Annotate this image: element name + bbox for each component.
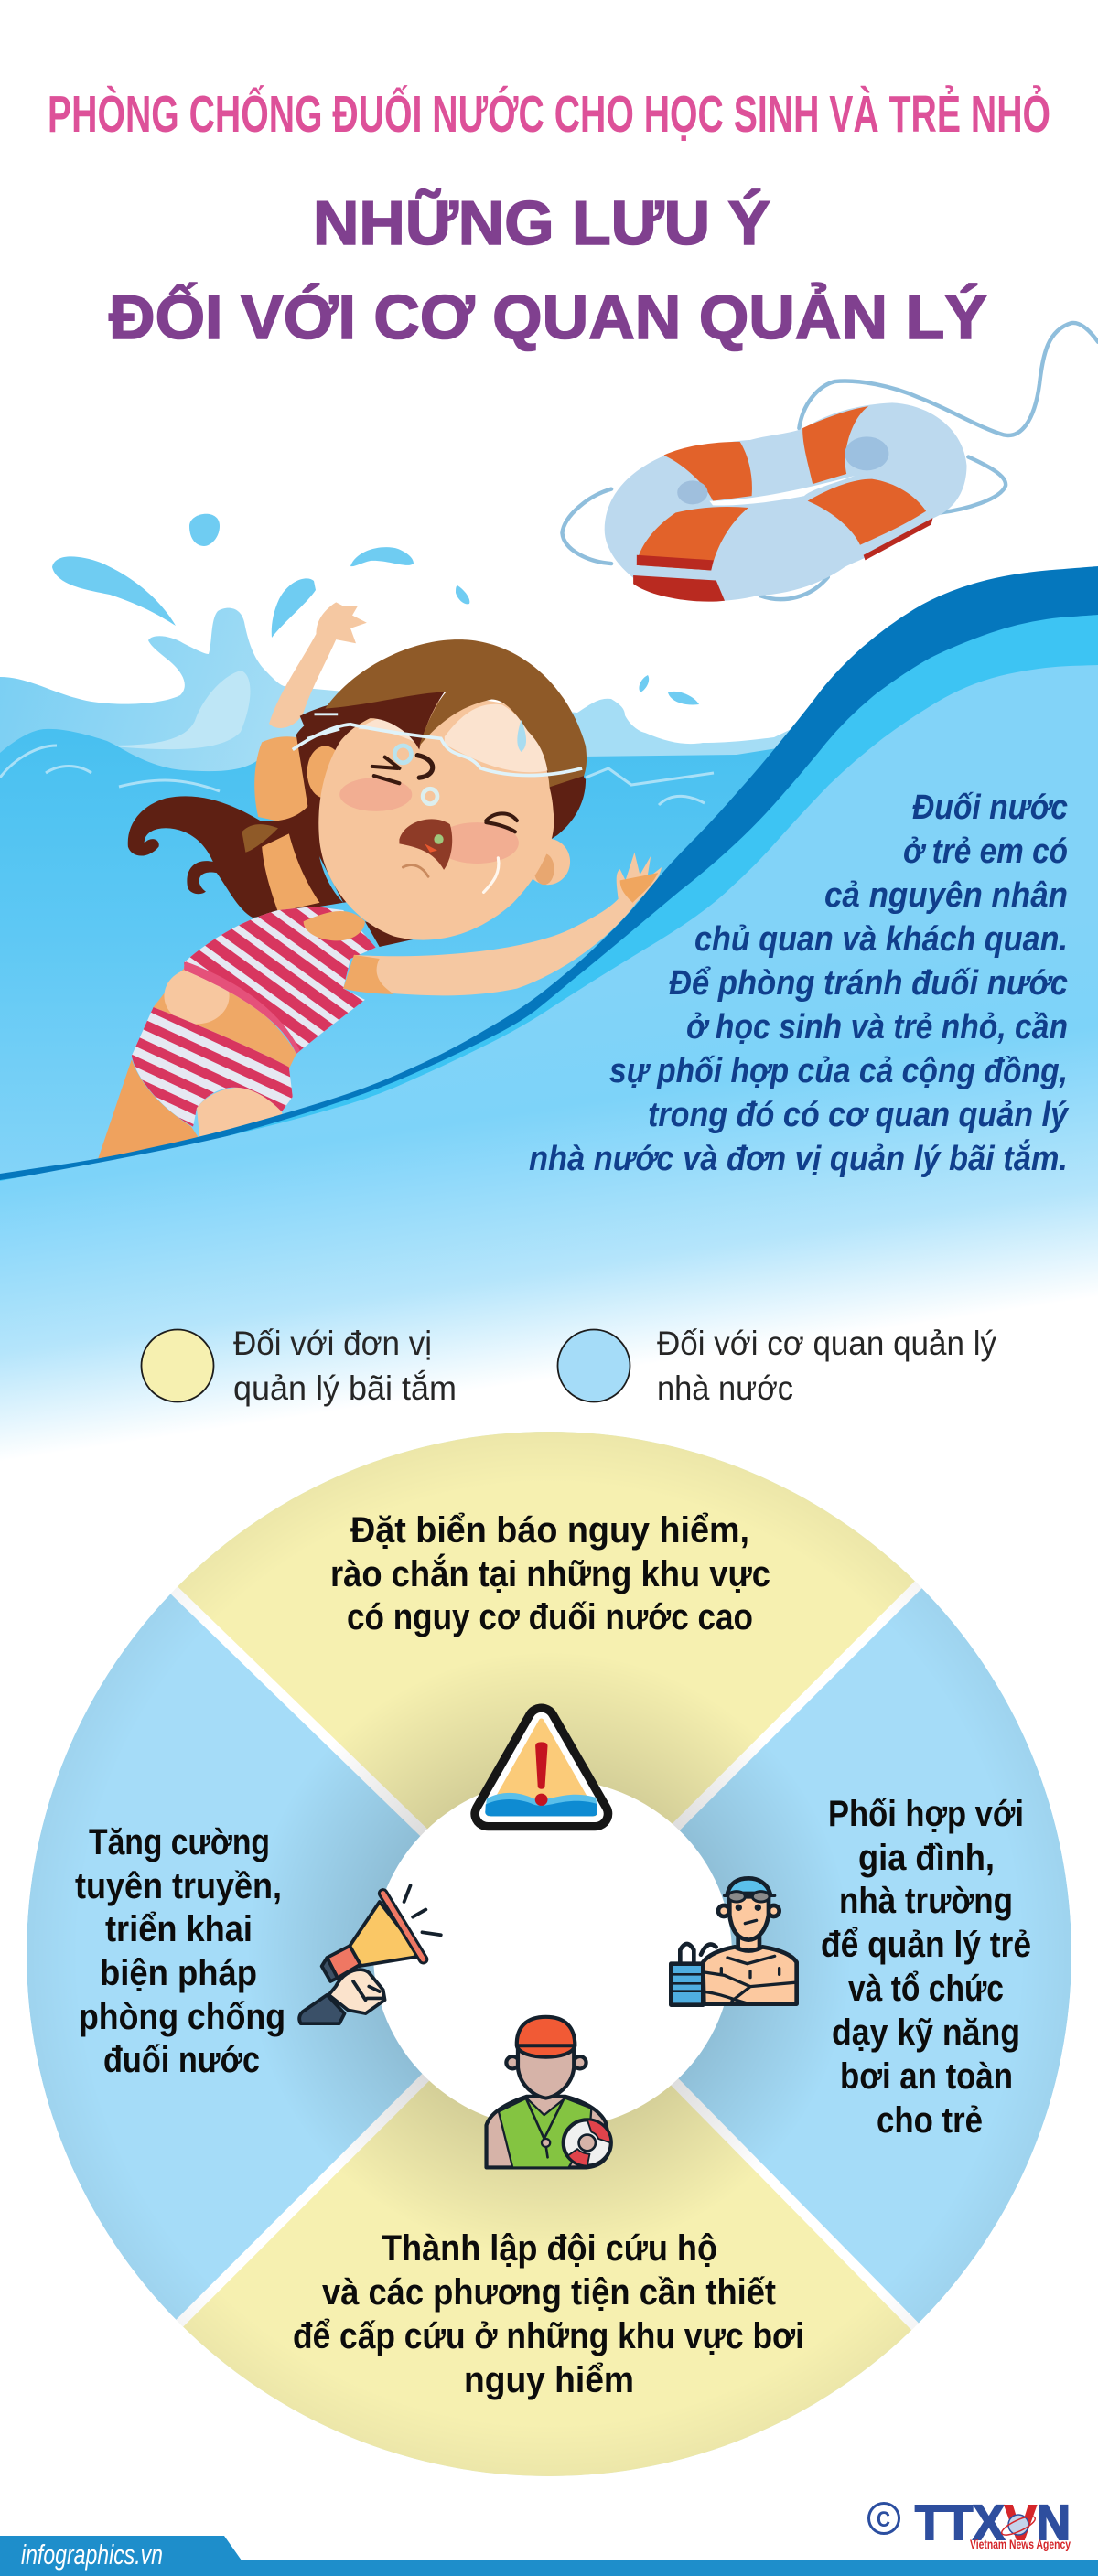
legend: beach management units: Đối với đơn vị (233, 1325, 432, 1362)
legend: beach management units: quản lý bãi tắm (233, 1369, 457, 1407)
icon: life buoy (562, 323, 1098, 602)
fringe shadow (300, 692, 445, 750)
legend: state agencies: nhà nước (657, 1369, 793, 1407)
text: left sector (75, 1822, 285, 2080)
mouth (399, 819, 452, 870)
blush (339, 778, 412, 811)
logo: TTXVN copyright: C (877, 2507, 890, 2532)
stripes (637, 406, 926, 570)
text: right sector: gia đình, (858, 1838, 995, 1878)
text: left sector: đuối nước (103, 2040, 260, 2080)
back hair (296, 701, 586, 903)
hole (709, 476, 855, 506)
water background behind girl (0, 608, 824, 1281)
text: intro paragraph (529, 789, 1070, 1178)
eyes, nose, tear (372, 756, 517, 892)
icon: water splashes (52, 514, 699, 704)
face (318, 699, 554, 940)
title: main heading: NHỮNG LƯU Ý (313, 188, 770, 258)
wave: cyan band (0, 615, 1098, 1372)
far-side ear (307, 746, 343, 799)
text: right sector: và tổ chức (848, 1969, 1004, 2009)
text: left sector: triển khai (105, 1909, 253, 1949)
raised arm (269, 602, 367, 728)
text: left sector: phòng chống (79, 1997, 285, 2037)
text: right sector: để quản lý trẻ (821, 1925, 1031, 1965)
swimsuit top (184, 906, 376, 1054)
text: right sector: cho trẻ (877, 2100, 983, 2141)
near ear (525, 839, 570, 885)
chart: life ring with four sectors (27, 1432, 1071, 2476)
title: main heading: ĐỐI VỚI CƠ QUAN QUẢN LÝ (109, 282, 987, 352)
text: bottom sector: nguy hiểm (464, 2360, 634, 2400)
wave: dark blue band (0, 566, 1098, 1372)
neck (304, 911, 365, 940)
illustration: drowning girl (98, 602, 662, 1179)
submerged arm (254, 736, 315, 824)
bubbles (394, 746, 411, 763)
text: intro paragraph: Đuối nước (912, 789, 1068, 827)
water line (293, 724, 582, 776)
front arm (343, 853, 662, 995)
text: intro paragraph: chủ quan và khách quan. (694, 920, 1068, 959)
text: left sector: Tăng cường (89, 1822, 270, 1862)
text: top sector: Đặt biển báo nguy hiểm, (350, 1510, 749, 1551)
footer bar (0, 2536, 1098, 2576)
icon: swimmer (671, 1878, 797, 2005)
text: right sector: dạy kỹ năng (832, 2012, 1020, 2053)
back neck (262, 833, 319, 912)
text: top sector: có nguy cơ đuối nước cao (347, 1597, 753, 1637)
sector: top warning signs (174, 1432, 919, 1830)
text: right sector: bơi an toàn (840, 2056, 1013, 2097)
footer source text: infographics.vn (21, 2538, 163, 2571)
ponytail (128, 779, 343, 918)
text: bottom sector: Thành lập đội cứu hộ (382, 2228, 717, 2269)
legend: beach management units (141, 1325, 457, 1407)
text: intro paragraph: Để phòng tránh đuối nước (669, 964, 1068, 1003)
text: intro paragraph: cả nguyên nhân (824, 876, 1068, 915)
legs (98, 1059, 206, 1159)
text: right sector (821, 1794, 1031, 2141)
buoy body (605, 402, 966, 601)
text: intro paragraph: ở trẻ em có (903, 832, 1068, 871)
sector: bottom rescue team (179, 2080, 915, 2476)
text: bottom sector (293, 2228, 804, 2400)
text: top sector (330, 1510, 770, 1637)
text: right sector: Phối hợp với (828, 1794, 1024, 1834)
hair top (325, 639, 587, 787)
text: bottom sector: và các phương tiện cần thiết (322, 2272, 776, 2313)
text: bottom sector: để cấp cứu ở những khu vực bơi (293, 2316, 804, 2356)
title: main heading (109, 188, 987, 352)
legend: state agencies: Đối với cơ quan quản lý (657, 1325, 996, 1362)
logo: TTXVN copyright: TTXVN (915, 2496, 1071, 2550)
text: left sector: tuyên truyền, (75, 1866, 282, 1906)
icon: megaphone (299, 1885, 441, 2023)
belly (154, 968, 296, 1068)
text: top sector: rào chắn tại những khu vực (330, 1552, 770, 1594)
text: left sector: biện pháp (100, 1953, 257, 1993)
icon: lifeguard (487, 2017, 611, 2167)
panel: intro background (0, 665, 1098, 1500)
ropes (562, 323, 1098, 599)
text: right sector: nhà trường (839, 1881, 1013, 1921)
icon: warning triangle (485, 1721, 597, 1816)
swimsuit bottom (132, 1007, 293, 1127)
forehead (358, 713, 419, 744)
legend: state agencies (558, 1325, 996, 1407)
